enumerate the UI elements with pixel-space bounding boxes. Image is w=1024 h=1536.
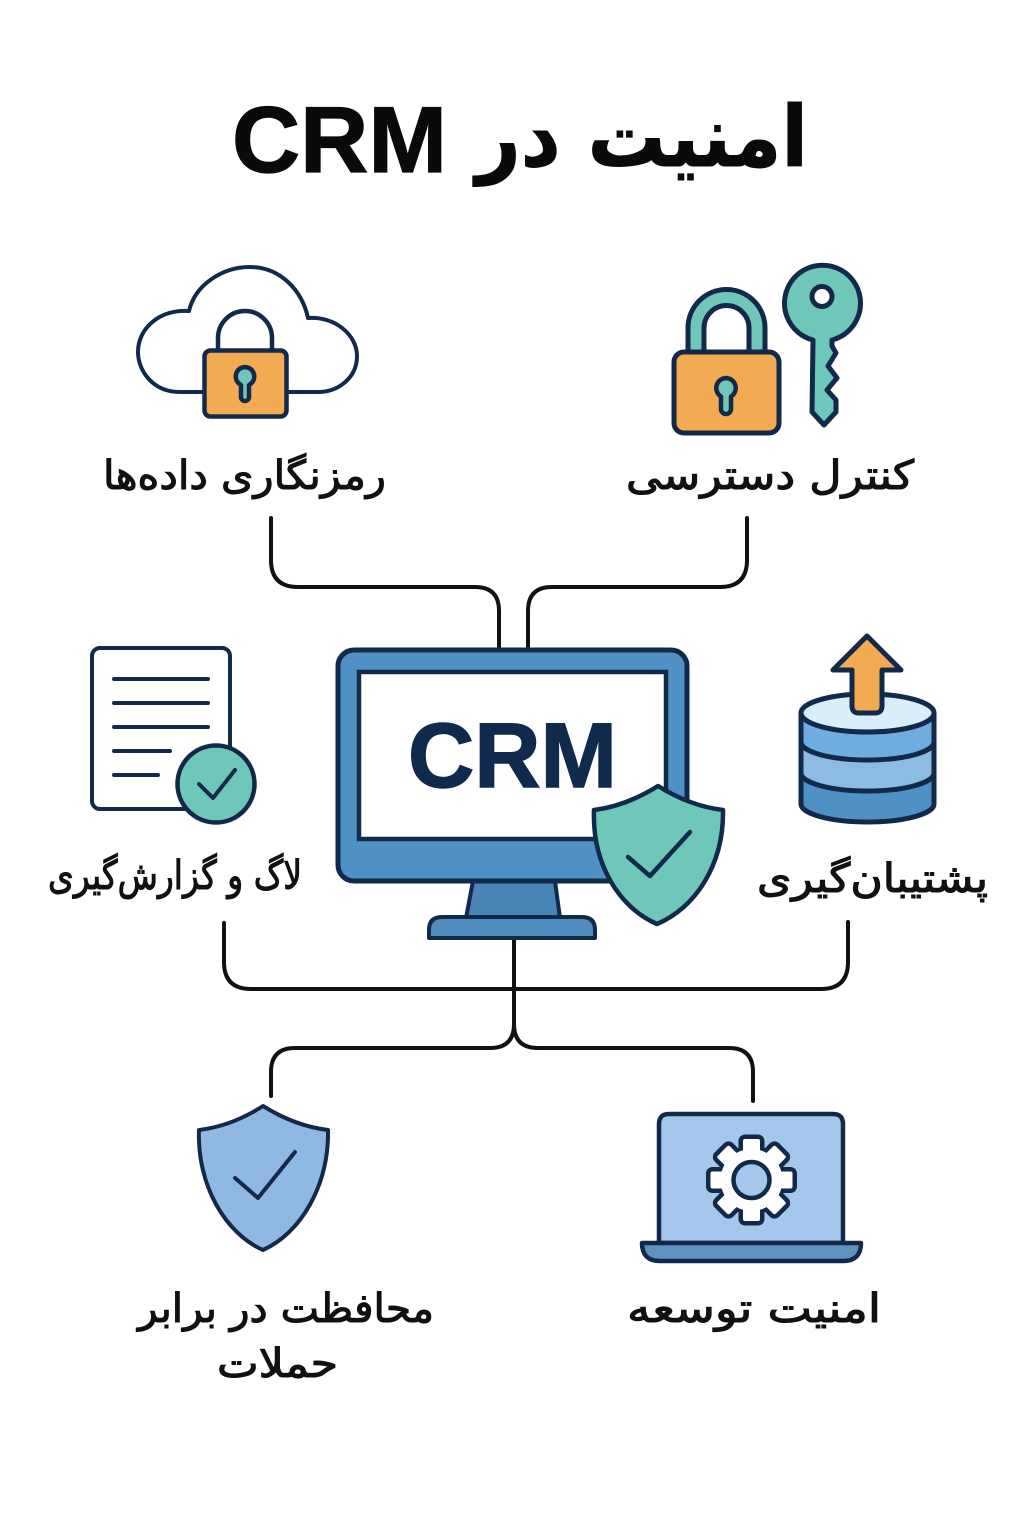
title: CRM — [232, 87, 447, 192]
title: امنیت در — [472, 88, 808, 187]
icon: report document with check — [92, 648, 254, 822]
label: attack protection: حملات — [217, 1341, 338, 1387]
icon: cloud with padlock — [138, 267, 357, 416]
icon: laptop with gear — [642, 1114, 861, 1261]
central CRM monitor — [338, 650, 723, 938]
monitor stand — [466, 881, 560, 918]
monitor base — [429, 917, 595, 938]
label: attack protection — [136, 1286, 434, 1387]
icon: blue shield with check — [199, 1106, 328, 1250]
title — [232, 87, 808, 192]
icon: teal shield with check — [594, 786, 723, 924]
label: development security: امنیت توسعه — [627, 1286, 881, 1332]
label: attack protection: محافظت در برابر — [136, 1286, 434, 1332]
label: backup: پشتیبان‌گیری — [757, 856, 988, 902]
connector lines — [224, 518, 848, 1101]
label: data encryption: رمزنگاری داده‌ها — [103, 453, 386, 499]
monitor frame — [338, 650, 687, 881]
label: access control: کنترل دسترسی — [626, 453, 915, 499]
icon: padlock and key — [674, 265, 860, 433]
monitor screen — [359, 672, 666, 839]
icon: database with upload arrow — [801, 636, 934, 822]
CRM label on screen: CRM — [408, 705, 617, 807]
label: logging and reporting: لاگ و گزارش‌گیری — [48, 853, 302, 899]
